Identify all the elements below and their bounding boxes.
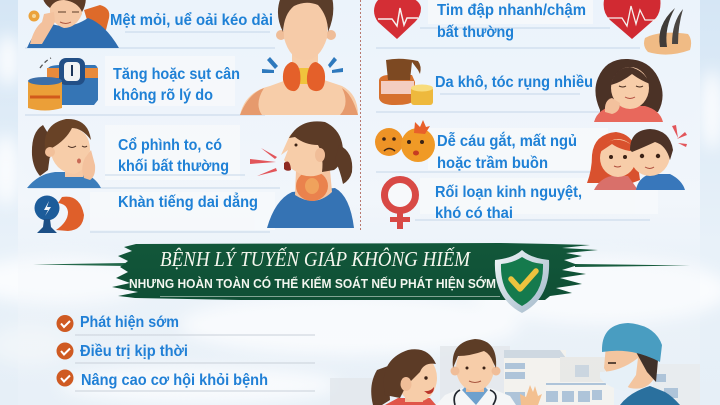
symptom: goiter <box>118 136 229 175</box>
icon: heart with hair and skin <box>604 0 691 55</box>
illustration: doctor <box>436 339 516 405</box>
symptom: heartbeat: bất thường <box>437 24 514 41</box>
symptom: weight: không rõ lý do <box>113 87 213 104</box>
illustration: patient woman <box>371 349 437 405</box>
benefit: early detection: Phát hiện sớm <box>80 314 179 331</box>
symptom: fatigue: Mệt mỏi, uể oải kéo dài <box>110 11 273 29</box>
icon: heart <box>374 0 421 39</box>
hospital building <box>330 346 700 405</box>
symptom: weight <box>113 66 240 104</box>
symptom: dry skin and hair loss: Da khô, tóc rụng nhiều <box>435 74 593 91</box>
banner subheading: NHƯNG HOÀN TOÀN CÓ THỂ KIỂM SOÁT NẾU PHÁT HIỆN SỚM <box>129 276 496 291</box>
column divider <box>360 0 362 232</box>
symptom: menstrual and fertility: Rối loạn kinh nguyệt, <box>435 184 582 201</box>
icon: emotion faces <box>375 120 435 162</box>
illustration: surgeon in mask <box>600 323 680 405</box>
symptom: heartbeat: Tim đập nhanh/chậm <box>437 2 586 19</box>
benefit: recovery: Nâng cao cơ hội khỏi bệnh <box>81 372 268 389</box>
icon: profile woman with swollen neck <box>250 121 354 228</box>
symptom: menstrual and fertility: khó có thai <box>435 205 513 222</box>
symptom: goiter: khối bất thường <box>118 158 229 175</box>
banner: green brush stroke <box>33 243 690 300</box>
icon: female symbol <box>384 180 416 229</box>
symptom: mood and sleep: Dễ cáu gắt, mất ngủ <box>437 131 577 150</box>
benefit lines <box>75 335 315 391</box>
icon: neck with thyroid <box>240 0 358 115</box>
icon: woman touching face <box>27 119 101 188</box>
icon: cream jar and candle <box>379 59 433 105</box>
symptom: mood and sleep <box>437 131 577 172</box>
illustration: raised hand <box>520 385 542 405</box>
icon: shield with check <box>495 250 549 313</box>
icon: scale and can <box>28 58 98 110</box>
icon: tired woman <box>27 0 119 48</box>
banner heading: BỆNH LÝ TUYẾN GIÁP KHÔNG HIẾM <box>160 247 471 271</box>
symptom: mood and sleep: hoặc trầm buồn <box>437 155 548 172</box>
icon: long hair woman <box>594 59 663 122</box>
benefit: early detection <box>56 314 179 332</box>
icon: couple <box>587 125 687 190</box>
symptom: goiter: Cổ phình to, có <box>118 136 222 154</box>
symptom: hoarseness: Khàn tiếng dai dẳng <box>118 192 258 211</box>
symptom: weight: Tăng hoặc sụt cân <box>113 66 240 83</box>
icon: voice and kidney <box>34 196 84 233</box>
text backdrops <box>90 0 658 230</box>
symptom: menstrual and fertility <box>435 184 582 222</box>
separators <box>25 28 650 232</box>
benefit: timely treatment: Điều trị kịp thời <box>80 343 188 360</box>
symptom: heartbeat <box>437 2 586 41</box>
